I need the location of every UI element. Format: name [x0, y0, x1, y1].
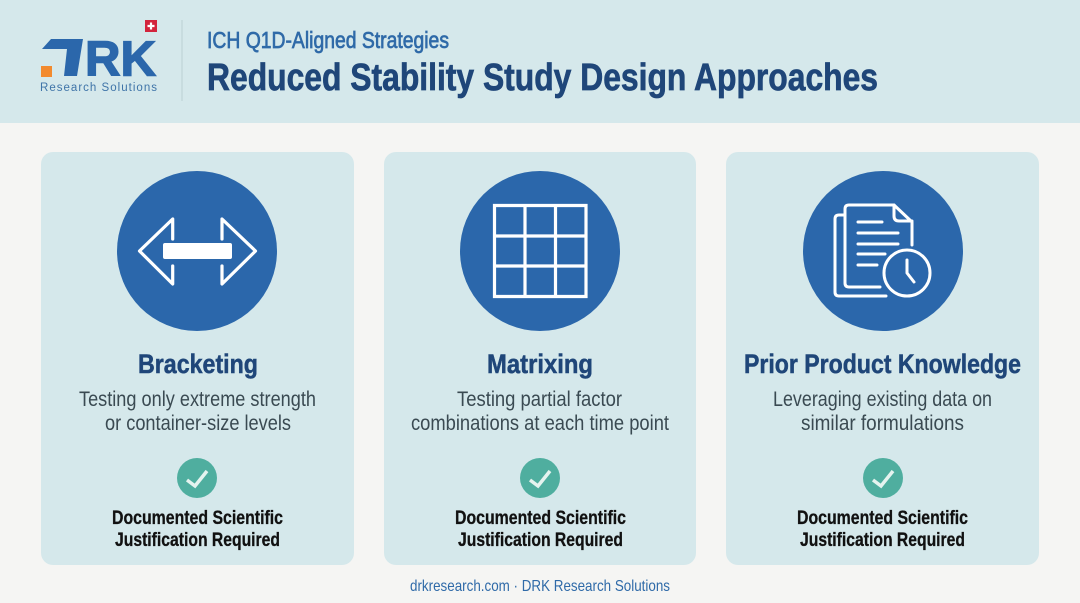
icon: documents with clock [803, 171, 963, 331]
footer: drkresearch.com · DRK Research Solutions [410, 578, 670, 595]
description: Bracketing: or container-size levels [105, 412, 291, 435]
icon: check mark [520, 458, 560, 498]
description: Prior Product Knowledge: similar formulations [801, 412, 964, 435]
logo: DRK Research Solutions: Research Solutions [40, 82, 157, 94]
description: Matrixing: combinations at each time point [411, 412, 669, 435]
icon: check mark [863, 458, 903, 498]
heading: Prior Product Knowledge: Prior Product Knowledge [744, 349, 1021, 379]
description: Bracketing: Testing only extreme strength [79, 388, 316, 411]
panel: Bracketing [41, 152, 354, 565]
icon: bracketing arrows [117, 171, 277, 331]
subtitle: ICH Q1D-Aligned Strategies [207, 27, 449, 53]
justification note [797, 508, 968, 551]
heading: Matrixing: Matrixing [487, 349, 593, 379]
icon: matrix grid [460, 171, 620, 331]
header band [0, 0, 1080, 123]
description: Matrixing [411, 388, 669, 435]
description: Prior Product Knowledge [773, 388, 992, 435]
logo: DRK Research Solutions [40, 20, 157, 94]
title: Reduced Stability Study Design Approaches [207, 57, 878, 99]
justification note: Justification Required [115, 530, 280, 551]
panel: Prior Product Knowledge [726, 152, 1039, 565]
justification note: Justification Required [800, 530, 965, 551]
description: Prior Product Knowledge: Leveraging existing data on [773, 388, 992, 411]
panel: Matrixing [384, 152, 696, 565]
justification note: Documented Scientific [112, 508, 283, 529]
justification note [455, 508, 626, 551]
description: Matrixing: Testing partial factor [457, 388, 622, 411]
justification note [112, 508, 283, 551]
justification note: Documented Scientific [455, 508, 626, 529]
icon: check mark [177, 458, 217, 498]
justification note: Documented Scientific [797, 508, 968, 529]
heading: Bracketing: Bracketing [138, 349, 258, 379]
logo: DRK Research Solutions: RK [85, 32, 156, 86]
description: Bracketing [79, 388, 316, 435]
justification note: Justification Required [458, 530, 623, 551]
